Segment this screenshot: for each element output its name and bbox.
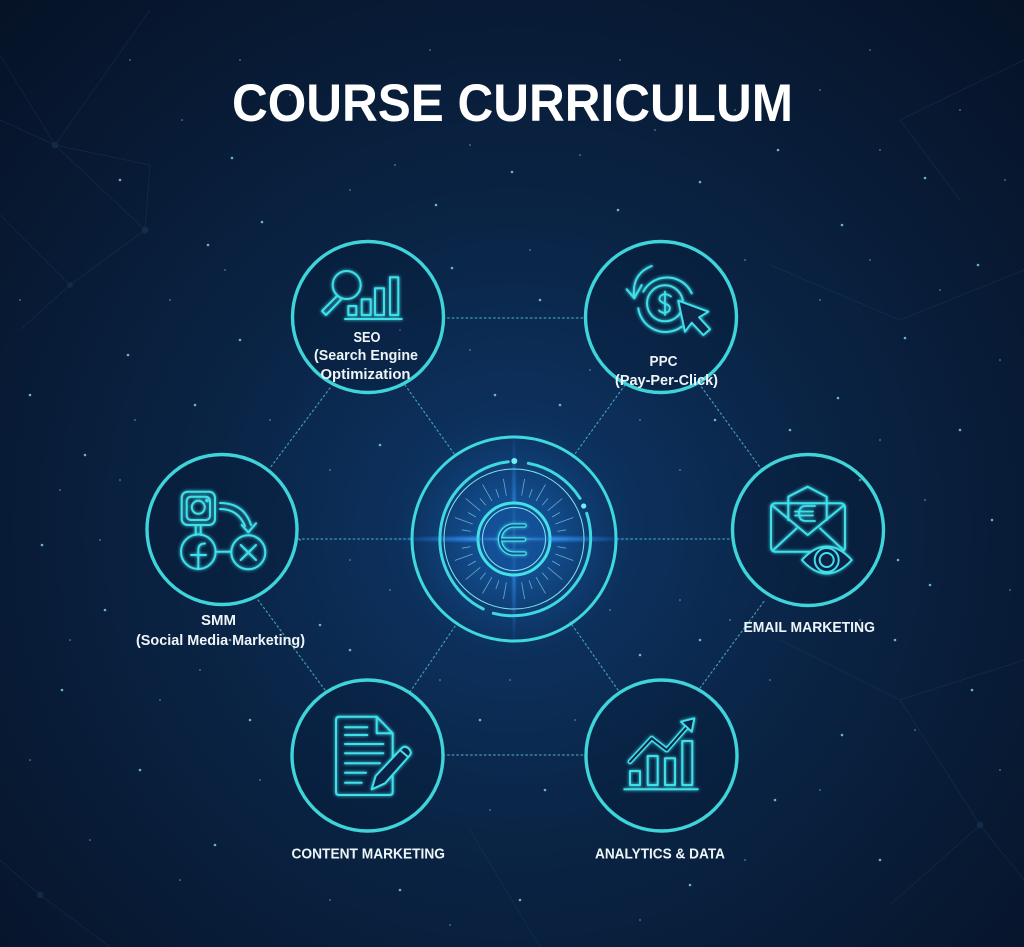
panel: PPC <box>586 242 736 392</box>
label: SMM <box>136 613 305 649</box>
icon: magnifier and bars <box>322 271 402 319</box>
label: SMM: SMM <box>201 613 236 629</box>
icon: euro coin <box>500 526 524 554</box>
label: SEO <box>314 330 418 383</box>
panel: Content Marketing <box>292 680 445 862</box>
title: COURSE CURRICULUM <box>232 74 793 133</box>
label: Email Marketing: EMAIL MARKETING <box>744 620 875 636</box>
panel: SMM <box>136 454 305 649</box>
panel: SEO <box>292 242 444 392</box>
icon: social networks <box>181 492 265 569</box>
icon: pay per click <box>627 266 710 335</box>
icon: envelope and eye <box>771 487 852 574</box>
label: Content Marketing: CONTENT MARKETING <box>292 846 445 862</box>
label: SEO: (Search Engine <box>314 348 418 364</box>
connector lines <box>258 318 765 755</box>
label: Analytics & Data: ANALYTICS & DATA <box>595 846 725 862</box>
icon: document and pen <box>336 717 411 795</box>
central hub <box>389 424 639 654</box>
label: PPC: PPC <box>650 354 678 370</box>
label: SMM: (Social Media Marketing) <box>136 633 305 649</box>
label: PPC <box>615 354 718 389</box>
label: SEO: Optimization <box>320 367 410 383</box>
panel: Analytics & Data <box>586 680 737 862</box>
label: SEO: SEO <box>354 330 380 346</box>
panel: Email Marketing <box>732 454 884 636</box>
label: PPC: (Pay-Per-Click) <box>615 373 718 389</box>
icon: bar chart with trend arrow <box>624 718 698 789</box>
